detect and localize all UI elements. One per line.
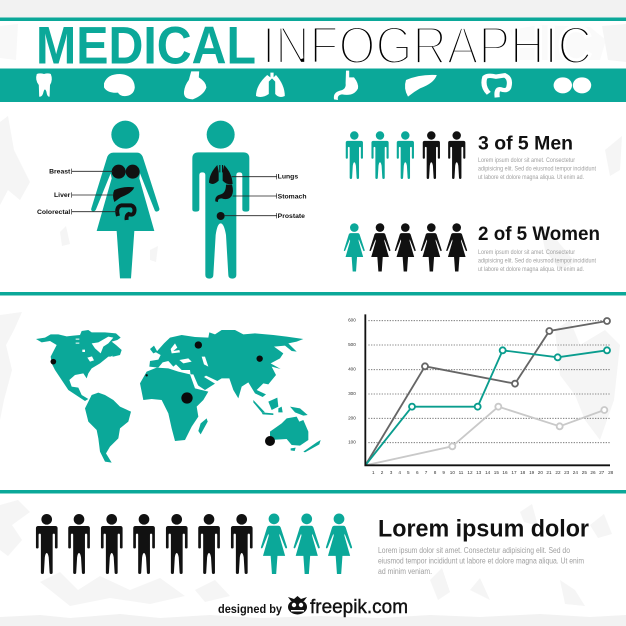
bottom body text: eiusmod tempor incididunt ut labore et dolore magna aliqua. Ut enim bbox=[378, 556, 584, 566]
icon: brain bbox=[104, 74, 135, 96]
panel: body figures with organ labels bbox=[37, 121, 307, 279]
body text: adipisicing elit. Sed do eiusmod tempor incididunt bbox=[478, 166, 596, 172]
organ labels: Lungs bbox=[278, 174, 298, 181]
organ labels: Liver bbox=[54, 192, 71, 199]
body text: adipisicing elit. Sed do eiusmod tempor incididunt bbox=[478, 258, 596, 264]
icon: liver bbox=[405, 75, 437, 97]
series: dark grey bbox=[365, 318, 610, 465]
section divider bbox=[0, 490, 626, 494]
x axis labels: 24 bbox=[573, 470, 578, 475]
x axis labels: 23 bbox=[564, 470, 570, 475]
x axis labels: 1 bbox=[372, 470, 375, 475]
x axis labels: 2 bbox=[381, 470, 384, 475]
body text: Lorem ipsum dolor sit amet. Consectetur bbox=[478, 157, 576, 164]
x axis labels: 15 bbox=[494, 470, 499, 475]
male figure bbox=[192, 121, 249, 279]
x axis labels: 11 bbox=[459, 470, 464, 475]
continents: Africa, Eurasia, Oceania bbox=[140, 330, 321, 452]
series: light grey bbox=[365, 404, 607, 465]
organ labels: Breast bbox=[49, 169, 71, 176]
icon: colon bbox=[484, 75, 509, 97]
title bbox=[36, 16, 592, 76]
icon: heart bbox=[184, 71, 206, 99]
x axis labels: 7 bbox=[425, 470, 428, 475]
body text: ut labore et dolore magna aliqua. Ut enim ad. bbox=[478, 174, 584, 181]
male organs bbox=[209, 165, 233, 220]
x axis labels: 8 bbox=[434, 470, 437, 475]
x axis labels: 22 bbox=[555, 470, 561, 475]
x axis labels bbox=[372, 470, 614, 475]
x axis labels: 14 bbox=[485, 470, 491, 475]
pictogram row: 7 men and 3 women bbox=[36, 514, 352, 574]
x axis labels: 26 bbox=[590, 470, 596, 475]
y axis labels bbox=[348, 318, 356, 445]
world map bbox=[36, 330, 321, 463]
series: teal bbox=[365, 347, 610, 465]
female organs bbox=[112, 165, 140, 220]
x axis labels: 21 bbox=[546, 470, 552, 475]
bottom body text: ad minim veniam. bbox=[378, 567, 432, 576]
body text bbox=[478, 157, 596, 181]
x axis labels: 17 bbox=[511, 470, 517, 475]
female figure bbox=[91, 121, 159, 278]
body text: ut labore et dolore magna aliqua. Ut enim ad. bbox=[478, 266, 584, 273]
icon: stomach bbox=[334, 71, 358, 100]
body text: Lorem ipsum dolor sit amet. Consectetur bbox=[478, 249, 576, 256]
icon: freepik logo bbox=[288, 596, 307, 614]
panel: 2 of 5 women bbox=[344, 223, 600, 273]
y axis labels: 400 bbox=[348, 367, 356, 372]
panel: 3 of 5 men bbox=[346, 131, 596, 181]
x axis labels: 13 bbox=[476, 470, 482, 475]
continent: North America bbox=[36, 330, 122, 401]
organ labels: Stomach bbox=[278, 193, 307, 200]
x axis labels: 18 bbox=[520, 470, 526, 475]
heading: 2 of 5 Women bbox=[478, 223, 600, 245]
line chart bbox=[348, 314, 614, 475]
organ labels: Prostate bbox=[278, 213, 305, 220]
x axis labels: 4 bbox=[398, 470, 401, 475]
top rule bbox=[0, 18, 626, 21]
bottom body text: Lorem ipsum dolor sit amet. Consectetur adipisicing elit. Sed do bbox=[378, 546, 571, 555]
y axis labels: 500 bbox=[348, 342, 356, 347]
band with organ icons bbox=[0, 68, 626, 102]
x axis labels: 19 bbox=[529, 470, 535, 475]
organ labels: Colorectal bbox=[37, 209, 70, 216]
body text bbox=[478, 249, 596, 273]
x axis labels: 16 bbox=[502, 470, 508, 475]
x axis labels: 27 bbox=[599, 470, 605, 475]
title: INFOGRAPHIC bbox=[262, 16, 592, 76]
icon: testes bbox=[554, 77, 591, 93]
x axis labels: 25 bbox=[582, 470, 587, 475]
credit: designed by freepik bbox=[218, 596, 408, 618]
women pictogram row bbox=[344, 223, 467, 272]
section divider bbox=[0, 292, 626, 296]
y axis labels: 600 bbox=[348, 318, 356, 323]
y axis labels: 100 bbox=[348, 440, 356, 445]
x axis labels: 3 bbox=[390, 470, 393, 475]
icon: lungs bbox=[256, 73, 285, 97]
bottom heading: Lorem ipsum dolor bbox=[378, 516, 589, 542]
x axis labels: 20 bbox=[538, 470, 543, 475]
continent: South America and prevalence dots bbox=[50, 341, 275, 463]
credit: designed by freepik: freepik.com bbox=[310, 597, 408, 618]
x axis labels: 10 bbox=[450, 470, 455, 475]
title: MEDICAL bbox=[36, 16, 256, 76]
y axis labels: 200 bbox=[348, 415, 356, 420]
bottom body text bbox=[378, 546, 584, 576]
chart axes bbox=[365, 314, 610, 465]
x axis labels: 12 bbox=[467, 470, 473, 475]
icon: tooth bbox=[36, 73, 52, 97]
x axis labels: 28 bbox=[608, 470, 614, 475]
organ labels bbox=[37, 169, 307, 220]
gridlines bbox=[368, 321, 610, 443]
heading: 3 of 5 Men bbox=[478, 132, 573, 154]
x axis labels: 6 bbox=[416, 470, 419, 475]
leader lines bbox=[72, 169, 277, 218]
credit: designed by freepik: designed by bbox=[218, 602, 282, 616]
x axis labels: 5 bbox=[407, 470, 410, 475]
men pictogram row bbox=[346, 131, 465, 179]
x axis labels: 9 bbox=[442, 470, 445, 475]
y axis labels: 300 bbox=[348, 391, 356, 396]
